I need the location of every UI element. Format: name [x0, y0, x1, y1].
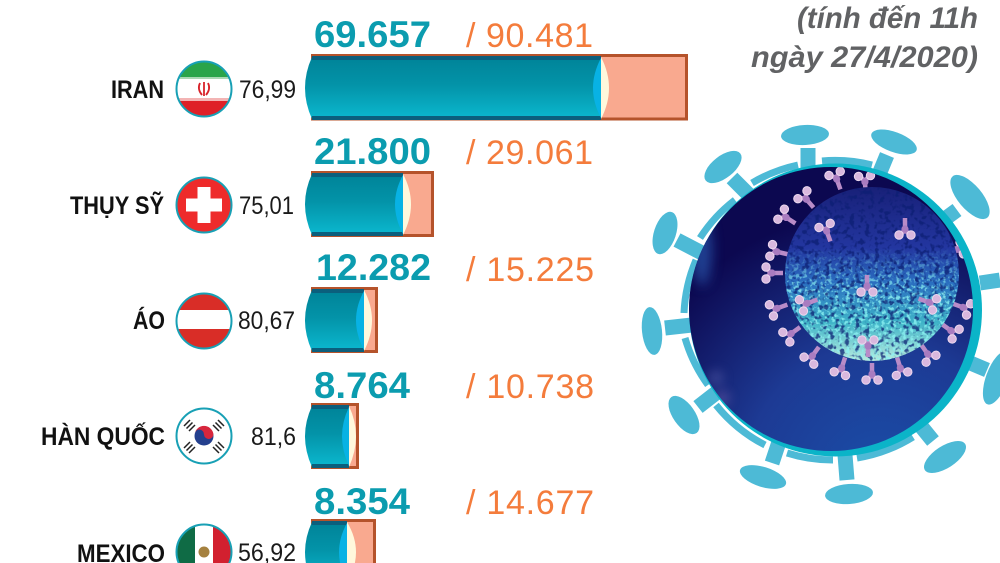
spikes behind sphere — [762, 166, 976, 384]
label: Iran: IRAN — [111, 76, 164, 104]
virus sphere — [785, 187, 960, 361]
icon: Iran flag — [176, 60, 232, 118]
date note: (tính đến 11h — [797, 2, 978, 35]
teal ring — [689, 164, 982, 456]
headline: Mexico total: / 14.677 — [466, 484, 594, 522]
row: Austria — [133, 247, 594, 352]
headline: South Korea total: / 10.738 — [466, 368, 594, 406]
headline: Switzerland total: / 29.061 — [466, 134, 593, 172]
bar: South Korea — [305, 404, 358, 468]
date note — [751, 2, 978, 74]
icon: Switzerland flag — [176, 178, 232, 232]
icon: South Korea flag — [176, 408, 232, 464]
label: Austria: ÁO — [133, 306, 165, 335]
date note: ngày 27/4/2020) — [751, 41, 978, 74]
value: South Korea rate: 81,6 — [251, 423, 296, 451]
headline: Iran recovered: 69.657 — [314, 14, 431, 55]
surface spikes — [794, 218, 942, 357]
illustration: coronavirus — [640, 124, 1000, 506]
row: Switzerland — [70, 131, 593, 236]
virus photo — [685, 165, 980, 455]
icon: Austria flag — [176, 294, 232, 348]
label: Switzerland: THỤY SỸ — [70, 190, 164, 220]
headline: Iran total: / 90.481 — [466, 17, 593, 55]
row: Mexico — [77, 481, 594, 563]
row: Iran — [111, 14, 686, 120]
bar: Switzerland — [305, 172, 432, 236]
bar: Austria — [305, 288, 376, 352]
value: Switzerland rate: 75,01 — [239, 192, 294, 220]
bar: Iran — [305, 56, 686, 120]
icon: Mexico flag — [176, 524, 232, 563]
value: Iran rate: 76,99 — [239, 76, 296, 104]
bar: Mexico — [305, 520, 374, 563]
value: Austria rate: 80,67 — [238, 307, 295, 335]
headline: Switzerland recovered: 21.800 — [314, 131, 431, 172]
headline: Mexico recovered: 8.354 — [314, 481, 410, 522]
virus outer spikes — [640, 124, 1000, 506]
row: South Korea — [41, 365, 594, 468]
headline: South Korea recovered: 8.764 — [314, 365, 410, 406]
label: South Korea: HÀN QUỐC — [41, 421, 165, 451]
headline: Austria recovered: 12.282 — [316, 247, 431, 288]
headline: Austria total: / 15.225 — [466, 251, 594, 289]
